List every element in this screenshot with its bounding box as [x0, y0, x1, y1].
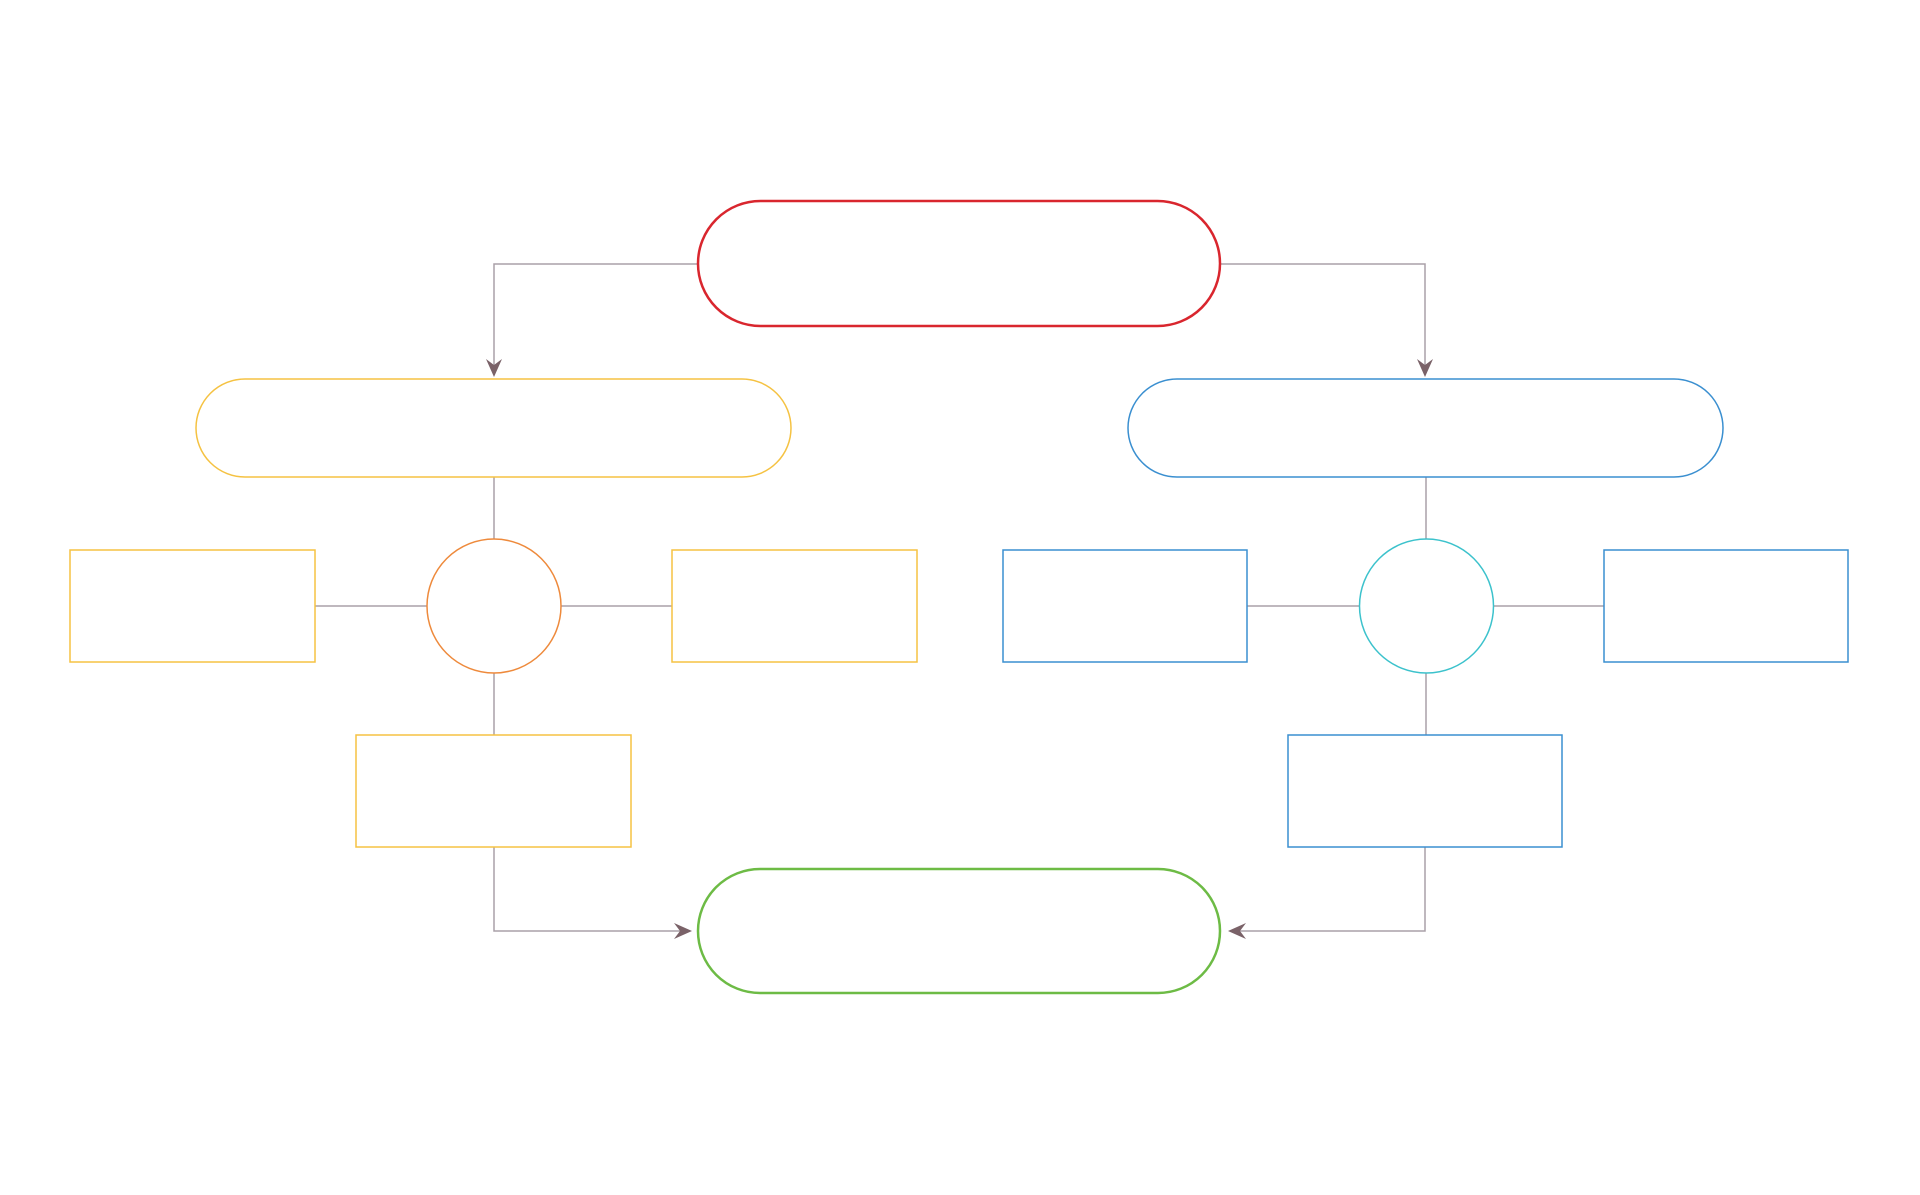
circle: right cyan	[1360, 539, 1494, 673]
box: right-left blue	[1003, 550, 1247, 662]
connector: top to left branch	[494, 264, 698, 370]
box: left-left yellow	[70, 550, 315, 662]
pill: top red	[698, 201, 1220, 326]
box: right-bottom blue	[1288, 735, 1562, 847]
arrow: into left pill	[486, 359, 502, 377]
arrow: into right pill	[1417, 359, 1433, 377]
connectors: right cluster	[1236, 477, 1604, 931]
connector: top to right branch	[1220, 264, 1425, 370]
box: right-right blue	[1604, 550, 1848, 662]
pill: bottom green	[698, 869, 1220, 993]
box: left-right yellow	[672, 550, 917, 662]
arrow: right into bottom pill	[1228, 923, 1246, 939]
circle: left orange	[427, 539, 561, 673]
connectors: left cluster	[315, 477, 684, 931]
box: left-bottom yellow	[356, 735, 631, 847]
pill: right blue	[1128, 379, 1723, 477]
arrow: left into bottom pill	[674, 923, 692, 939]
pill: left yellow	[196, 379, 791, 477]
